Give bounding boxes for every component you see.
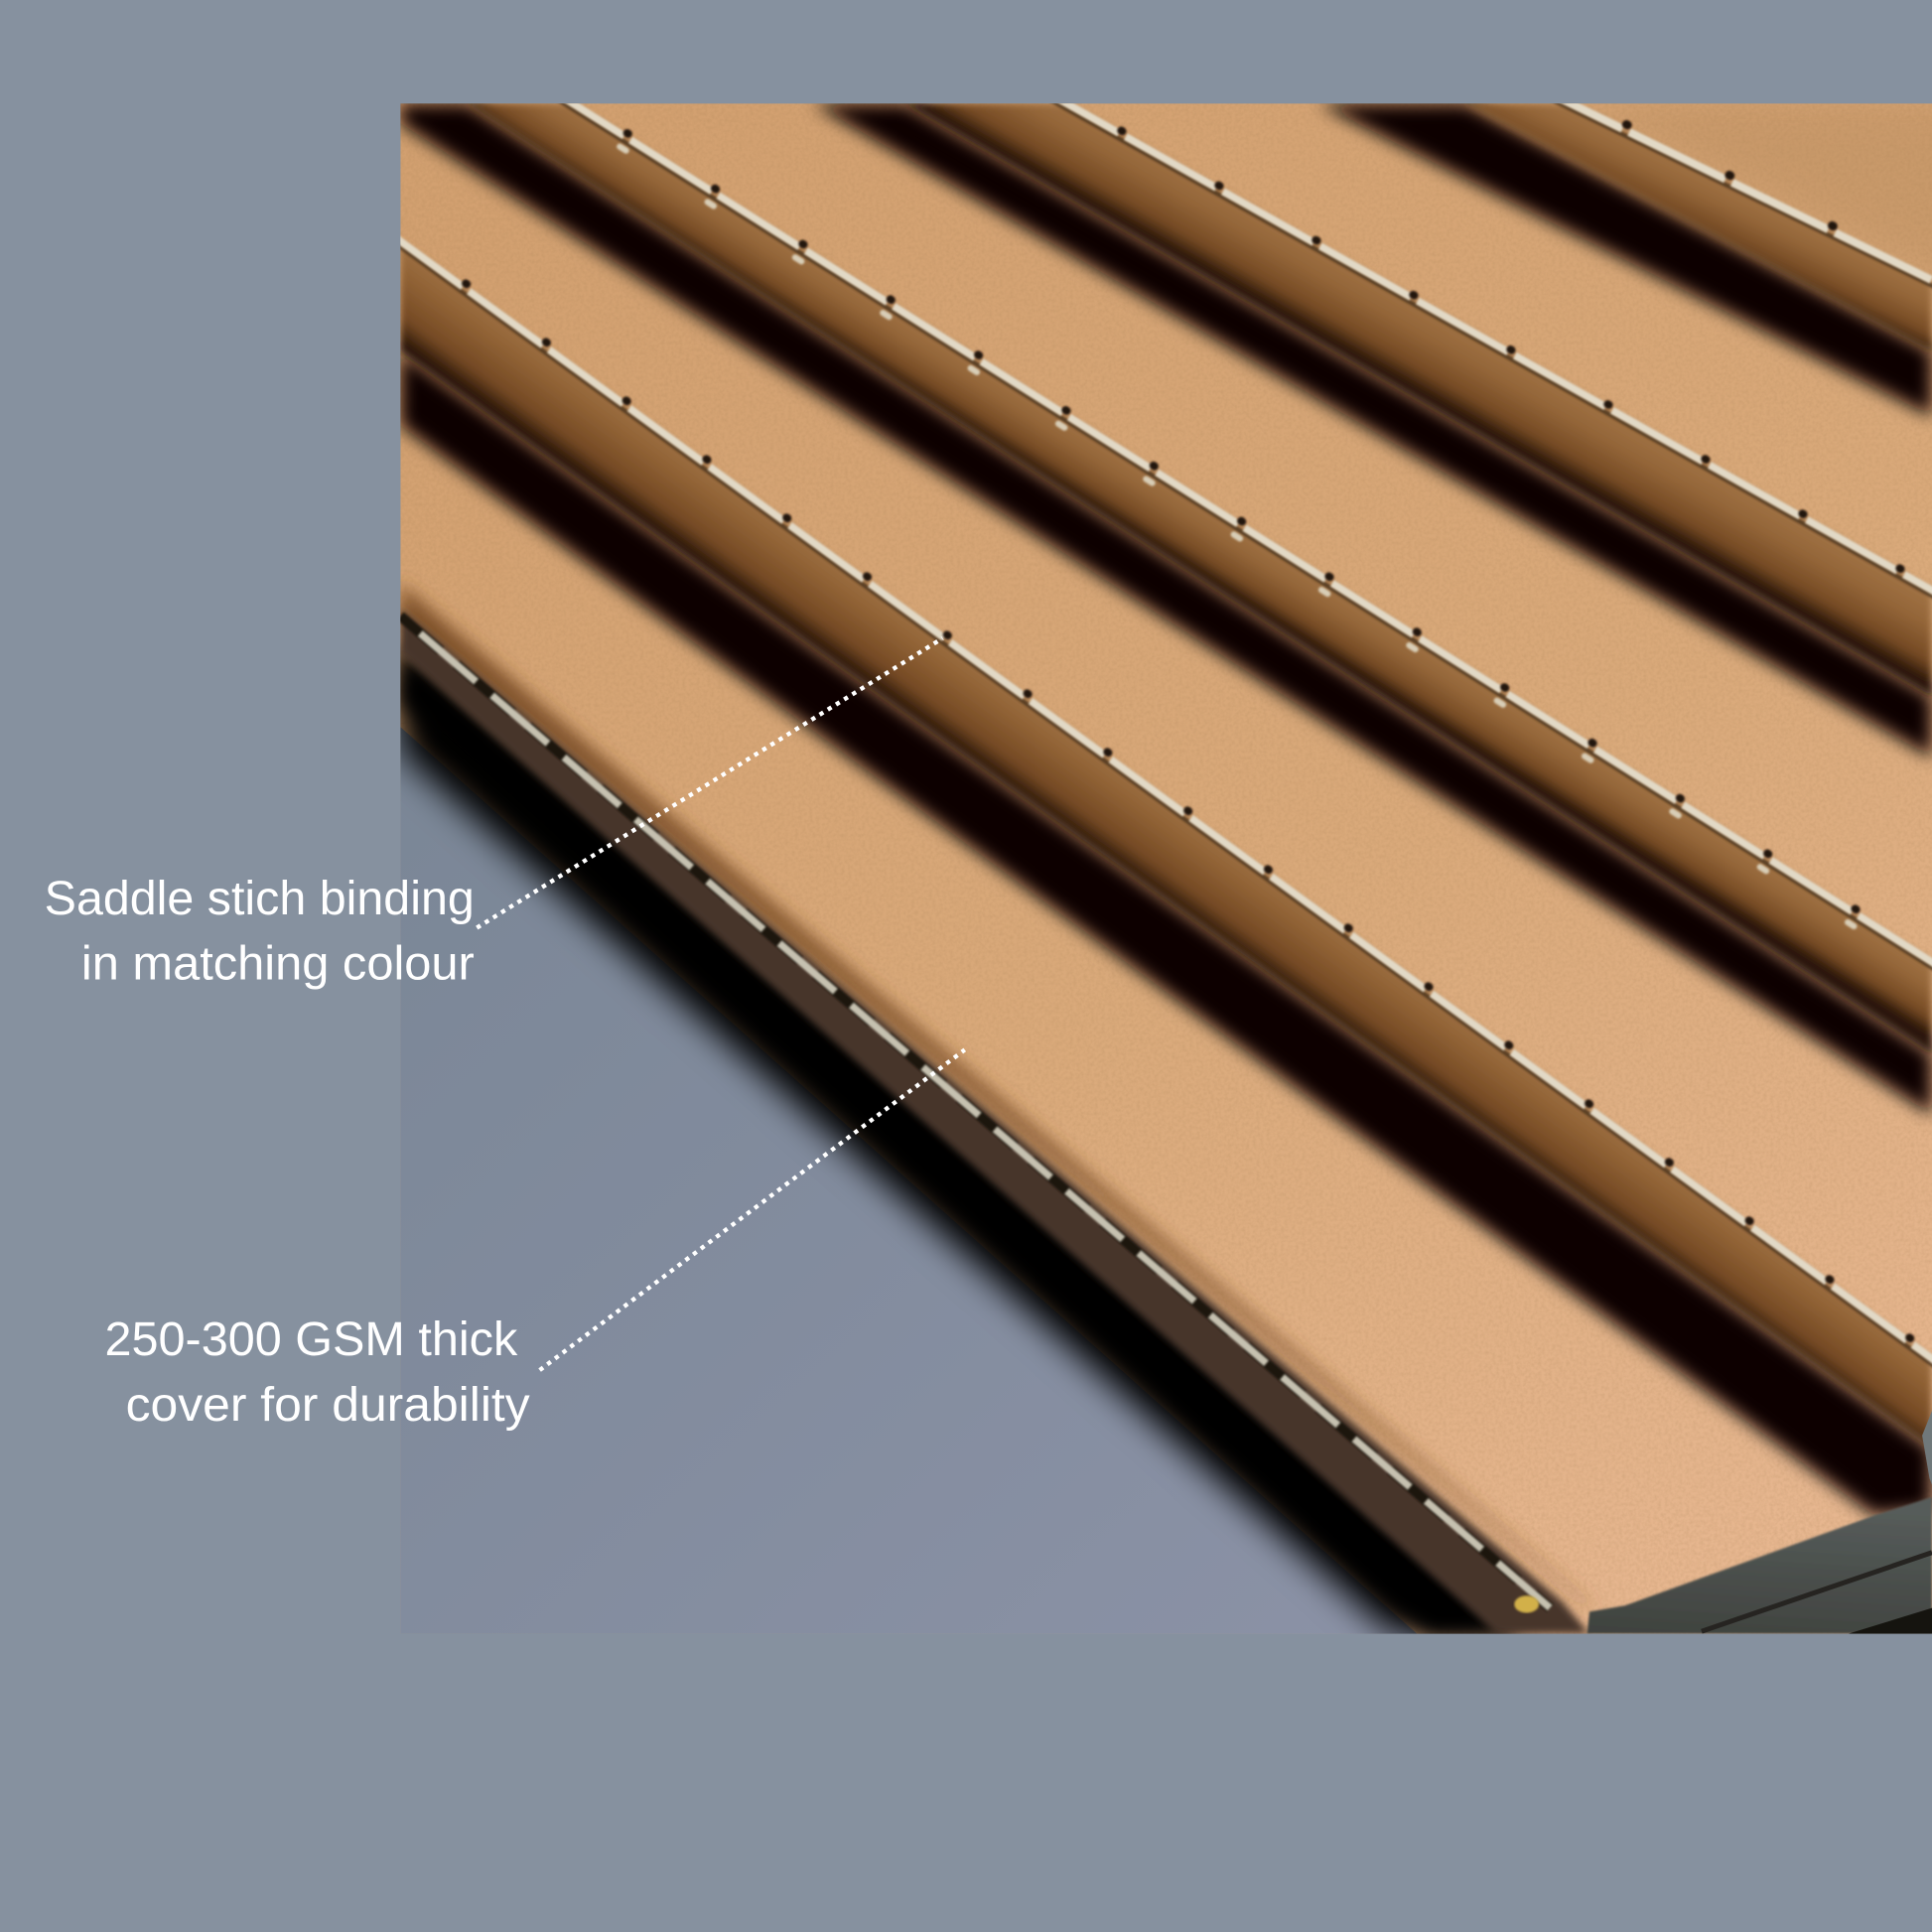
fold 4 — [384, 230, 1932, 1516]
grey sliver at right edge — [1922, 1411, 1932, 1484]
callout text — [104, 1312, 530, 1432]
shaded top-right panel — [1624, 105, 1932, 274]
panel edge shading — [400, 584, 1596, 1614]
fold 2 — [813, 80, 1932, 758]
callout: saddle stitch binding — [45, 638, 942, 991]
callout: cover thickness — [104, 1049, 965, 1432]
dark board at fold end — [1587, 1497, 1932, 1634]
callout leader line — [540, 1049, 965, 1370]
callout text: Saddle stich binding — [45, 872, 475, 925]
yellow thread end — [1514, 1595, 1539, 1613]
table surface — [400, 727, 1417, 1634]
callout text: cover for durability — [126, 1378, 530, 1432]
fold 1 — [1318, 80, 1932, 416]
infographic canvas — [46, 103, 1932, 1634]
callout leader line — [477, 638, 942, 928]
callout text: in matching colour — [81, 937, 475, 991]
bottom edge stitching — [400, 617, 1550, 1608]
fold 3 — [400, 82, 1932, 1115]
callout text — [45, 872, 475, 991]
bottom edge core shadow — [400, 647, 1516, 1634]
cardboard texture — [400, 103, 1932, 1634]
callout text: 250-300 GSM thick — [104, 1312, 518, 1366]
cardboard base — [400, 103, 1932, 1634]
bottom edge shadow — [400, 647, 1528, 1634]
photo: corrugated cardboard folder with stitched spine — [384, 80, 1932, 1634]
bottom edge strip — [400, 609, 1589, 1634]
